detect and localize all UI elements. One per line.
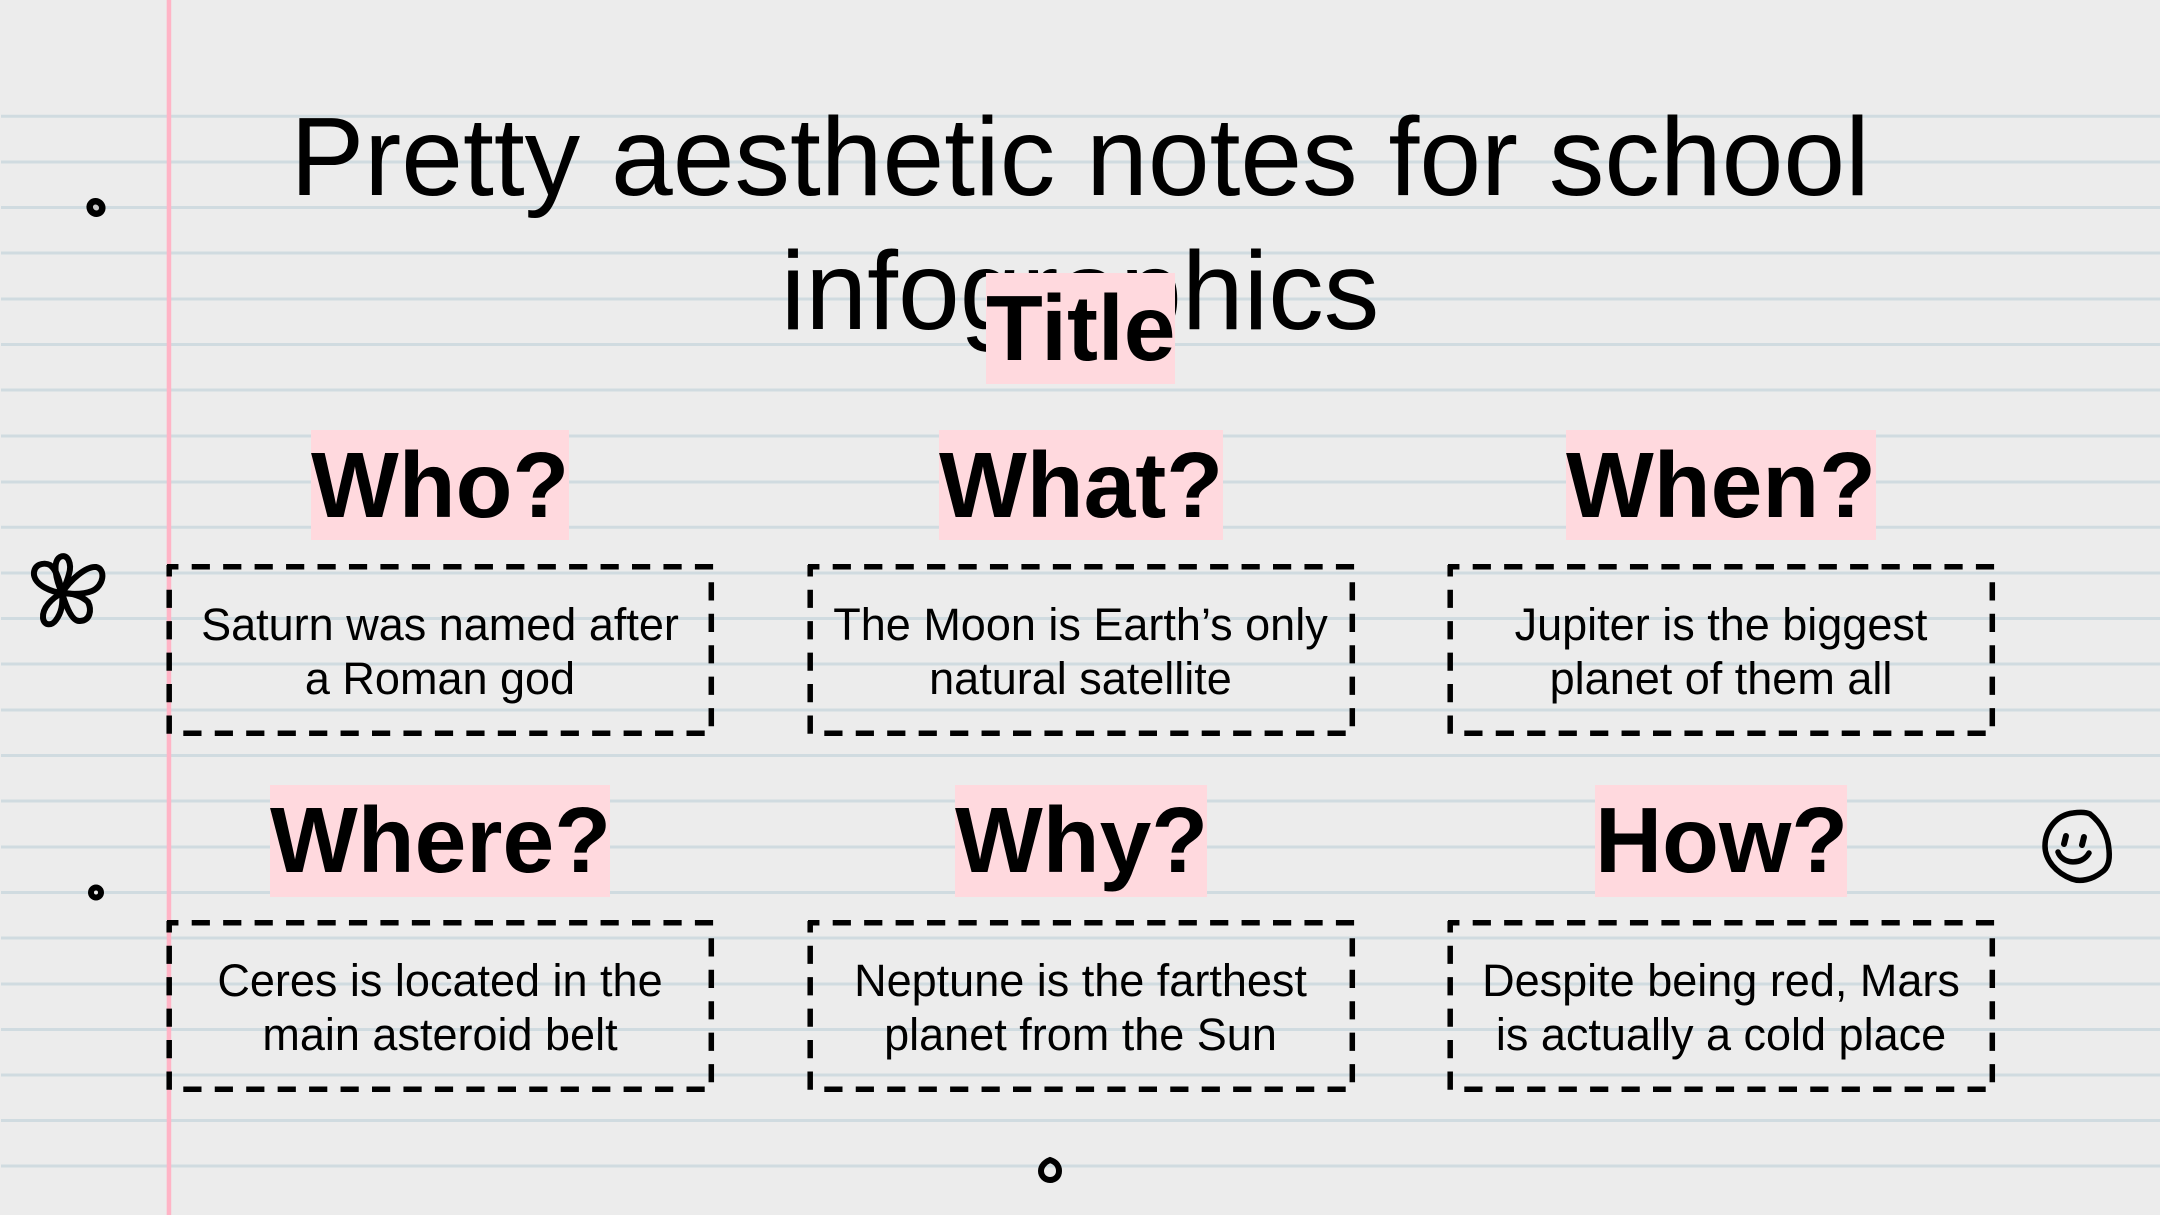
text box: Who: a Roman god <box>305 653 575 704</box>
text box: Why: planet from the Sun <box>884 1009 1277 1060</box>
text box: Why <box>807 920 1356 1092</box>
heading: Why?: Why? <box>955 788 1208 892</box>
heading: Where?: Where? <box>270 788 611 892</box>
text box: How: is actually a cold place <box>1496 1009 1946 1060</box>
text box: When: planet of them all <box>1550 653 1892 704</box>
title <box>290 95 1870 353</box>
icon: small doodle circle top left <box>86 198 106 217</box>
heading: Title tag: Title <box>986 276 1176 380</box>
icon: small doodle circle lower left <box>88 884 104 900</box>
text box: What: The Moon is Earth’s only <box>833 599 1328 650</box>
text box: Where: main asteroid belt <box>262 1009 618 1060</box>
icon: doodle circle bottom <box>1038 1156 1062 1183</box>
heading: What?: What? <box>939 433 1223 537</box>
text box: Where <box>166 920 714 1092</box>
title: infographics <box>781 229 1379 353</box>
text box: Who: Saturn was named after <box>201 599 679 650</box>
heading: Who?: Who? <box>311 433 569 537</box>
text box: When: Jupiter is the biggest <box>1515 599 1927 650</box>
text box: What <box>807 564 1356 736</box>
text box: How <box>1447 920 1996 1092</box>
icon: flower doodle <box>30 553 106 628</box>
text box: Who <box>166 564 714 736</box>
title: Pretty aesthetic notes for school <box>290 95 1870 219</box>
text box: How: Despite being red, Mars <box>1482 955 1960 1006</box>
heading: When?: When? <box>1566 433 1876 537</box>
text box: When <box>1447 564 1996 736</box>
text box: What: natural satellite <box>929 653 1232 704</box>
text box: Why: Neptune is the farthest <box>854 955 1307 1006</box>
heading: How?: How? <box>1595 788 1848 892</box>
icon: smiley face doodle <box>2042 810 2112 884</box>
text box: Where: Ceres is located in the <box>217 955 663 1006</box>
